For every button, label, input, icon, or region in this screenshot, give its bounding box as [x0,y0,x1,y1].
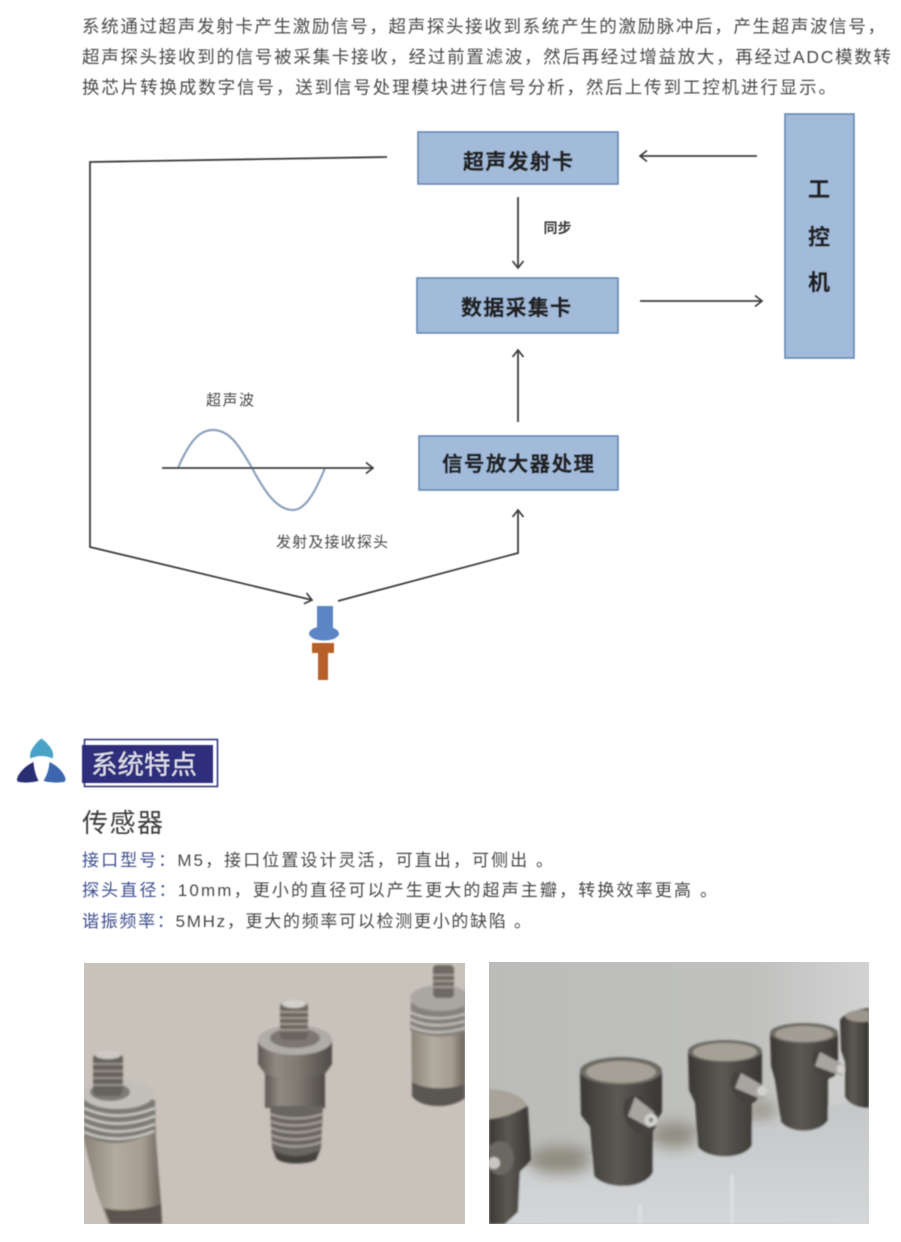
icon: probe [309,606,339,680]
sensor spec list [82,851,717,931]
arrow: amplifier to acquisition card [517,350,519,422]
intro paragraph: 系统通过超声发射卡产生激励信号，超声探头接收到系统产生的激励脉冲后，产生超声波信号， [82,16,885,36]
box: industrial computer: 机 [808,270,830,295]
sensor 2 [580,1072,662,1186]
chart: sine wave [162,430,373,510]
label: ultrasonic wave: 超声波 [206,391,254,409]
photo: side-connector sensors in a row [486,962,879,1224]
heading box: 系统特点 [91,750,197,780]
arrow: computer to transmit card [640,155,757,157]
section heading: system features [17,738,218,786]
box: ultrasonic transmit card [418,132,618,184]
box: data acquisition card: 数据采集卡 [461,297,571,320]
icon: three-petal logo [17,738,66,783]
spec: interface type: 接口型号：M5，接口位置设计灵活，可直出，可侧出 。 [82,851,553,870]
intro paragraph: 超声探头接收到的信号被采集卡接收，经过前置滤波，然后再经过增益放大，再经过ADC模数转 [82,47,891,67]
arrow: probe to amplifier [338,510,518,601]
arrow: sync [517,197,519,268]
box: industrial computer: 控 [808,225,830,250]
photo: threaded sensors on beige [82,963,470,1224]
label: sync: 同步 [544,220,572,236]
intro paragraph: 换芯片转换成数字信号，送到信号处理模块进行信号分析，然后上传到工控机进行显示。 [82,78,836,98]
sensor 3 [688,1052,762,1157]
box: ultrasonic transmit card: 超声发射卡 [463,151,573,174]
shadows [528,1146,592,1174]
box: signal amplifier [419,436,618,490]
sensor 1 [489,1090,531,1224]
block diagram [90,114,854,680]
box: data acquisition card [417,278,618,333]
intro paragraph [82,16,891,98]
spec: resonant frequency: 谐振频率：5MHz，更大的频率可以检测更小的缺陷 。 [82,912,531,931]
arrow: transmit card to probe [90,157,387,600]
sensor subheading: 传感器 [82,808,163,838]
spec: probe diameter: 探头直径：10mm，更小的直径可以产生更大的超声主瓣，转换效率更高 。 [82,881,717,900]
center sensor [265,1070,325,1108]
table surface [489,1098,869,1224]
sensor 4 [770,1034,838,1131]
highlights [640,1175,732,1224]
box: signal amplifier: 信号放大器处理 [442,453,594,476]
left sensor [84,1100,162,1224]
heading box [82,740,218,786]
label: transmit and receive probe: 发射及接收探头 [276,534,388,551]
sensor 5 [840,1008,869,1108]
box: industrial computer [785,114,854,358]
right sensor [411,1000,465,1106]
arrow: acquisition card to computer [640,300,762,302]
box: industrial computer: 工 [808,177,830,202]
